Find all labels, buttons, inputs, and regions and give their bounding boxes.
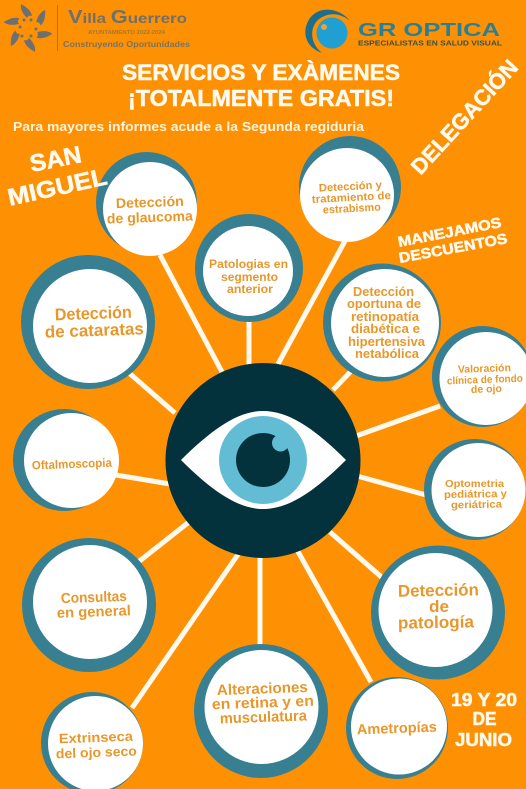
bubble: Valoración clínica de fondo de ojo: clínica de fondo: [447, 373, 523, 387]
bubble: Alteraciones en retina y en musculatura: [194, 644, 328, 778]
bubble: Detección de glaucoma: [96, 152, 197, 256]
bubble: Extrinseca del ojo seco: Extrinseca: [59, 729, 134, 746]
bubble: Detección de patología: patología: [398, 612, 475, 633]
label: Manejamos descuentos: DESCUENTOS: [398, 231, 509, 267]
bubble: Detección y tratamiento de estrabismo: estrabismo: [323, 201, 381, 217]
bubble: Detección oportuna de retinopatía: netabólica: [355, 346, 420, 361]
label: San Miguel: MIGUEL: [5, 164, 110, 212]
central eye icon: [166, 363, 360, 558]
bubble: Patologias en segmento anterior: segmento: [221, 272, 278, 284]
bubble: Ametropias: [346, 677, 448, 779]
bubble: Detección de patología: [371, 546, 505, 680]
bubble: Extrinseca del ojo seco: [41, 692, 143, 789]
logo: GR Optica: GR OPTICA: [358, 20, 500, 40]
bubble: Ametropias: Ametropías: [357, 720, 437, 738]
bubble: Detección oportuna de retinopatía: [323, 264, 441, 382]
bubble: Oftalmoscopia: Oftalmoscopia: [32, 456, 112, 472]
bubble: Detección y tratamiento de estrabismo: tratamiento de: [312, 190, 391, 206]
label: San Miguel: SAN: [27, 141, 84, 178]
logo: GR Optica: [305, 10, 502, 53]
bubble: Oftalmoscopia: [13, 409, 119, 511]
title: SERVICIOS Y EXÀMENES: [122, 60, 400, 85]
bubble: Optometria pediátrica y geriátrica: geriátrica: [451, 499, 502, 511]
bubble: Consultas en general: en general: [57, 603, 131, 622]
logo: Villa Guerrero: Villa Guerrero: [68, 7, 187, 27]
bubble: Alteraciones en retina y en musculatura: Alteraciones: [217, 679, 308, 699]
bubble: Alteraciones en retina y en musculatura: en retina y en: [212, 693, 314, 713]
bubble: Detección oportuna de retinopatía: hipertensiva: [348, 334, 426, 349]
subtitle: Para mayores informes acude a la Segunda regiduria: [13, 119, 365, 134]
label: 19 y 20 de junio: JUNIO: [455, 730, 512, 750]
bubble: Valoración clínica de fondo de ojo: [432, 326, 526, 427]
bubble: Valoración clínica de fondo de ojo: de ojo: [471, 383, 502, 396]
bubble: Detección de cataratas: Detección: [54, 303, 132, 324]
connector lines: [116, 241, 440, 708]
label: 19 y 20 de junio: [451, 690, 517, 750]
bubble: Patologias en segmento anterior: anterior: [227, 284, 274, 296]
bubble: Detección oportuna de retinopatía: Detección: [353, 284, 414, 299]
label: San Miguel: [5, 141, 110, 212]
bubble: Detección de glaucoma: de glaucoma: [107, 208, 193, 226]
bubble: Detección oportuna de retinopatía: diabética e: [351, 321, 420, 336]
label: 19 y 20 de junio: DE: [472, 709, 496, 729]
bubble: Extrinseca del ojo seco: del ojo seco: [56, 744, 137, 761]
bubble: Consultas en general: Consultas: [61, 589, 127, 607]
bubble: Patologias en segmento anterior: [195, 214, 303, 322]
bubble: Detección de cataratas: [21, 255, 155, 389]
bubble: Patologias en segmento anterior: Patologias en: [209, 259, 288, 271]
label: 19 y 20 de junio: 19 Y 20: [451, 690, 517, 710]
title: ¡TOTALMENTE GRATIS!: [128, 85, 394, 111]
bubble: Detección de glaucoma: Detección: [116, 193, 184, 211]
bubble: Detección de patología: de: [429, 597, 449, 616]
bubble: Alteraciones en retina y en musculatura: musculatura: [220, 707, 308, 727]
bubble: Detección y tratamiento de estrabismo: [299, 136, 401, 242]
logo: GR Optica: ESPECIALISTAS EN SALUD VISUAL: [358, 38, 502, 48]
label: Delegación: DELEGACIÓN: [406, 55, 523, 179]
bubble: Valoración clínica de fondo de ojo: Valoración: [458, 362, 511, 376]
bubble: Optometria pediátrica y geriátrica: Optometria: [445, 478, 504, 490]
bubble: Optometria pediátrica y geriátrica: pediátrica y: [444, 488, 507, 501]
title: [122, 60, 400, 111]
bubble: Consultas en general: [22, 538, 156, 672]
bubble: Detección oportuna de retinopatía: oportuna de: [347, 296, 421, 311]
logo: Villa Guerrero: AYUNTAMIENTO 2022-2024: [88, 30, 166, 36]
bubble: Detección oportuna de retinopatía: retinopatía: [351, 309, 420, 324]
bubble: Optometria pediátrica y geriátrica: [424, 439, 526, 540]
bubble: Detección de cataratas: de cataratas: [45, 319, 144, 342]
label: Manejamos descuentos: MANEJAMOS: [397, 215, 503, 251]
bubble: Detección y tratamiento de estrabismo: Detección y: [319, 179, 383, 195]
logo: Villa Guerrero: Construyendo Oportunidades: [63, 39, 190, 49]
label: Manejamos descuentos: [397, 215, 509, 267]
logo: Villa Guerrero: [4, 4, 190, 52]
bubble: Detección de patología: Detección: [398, 580, 479, 601]
